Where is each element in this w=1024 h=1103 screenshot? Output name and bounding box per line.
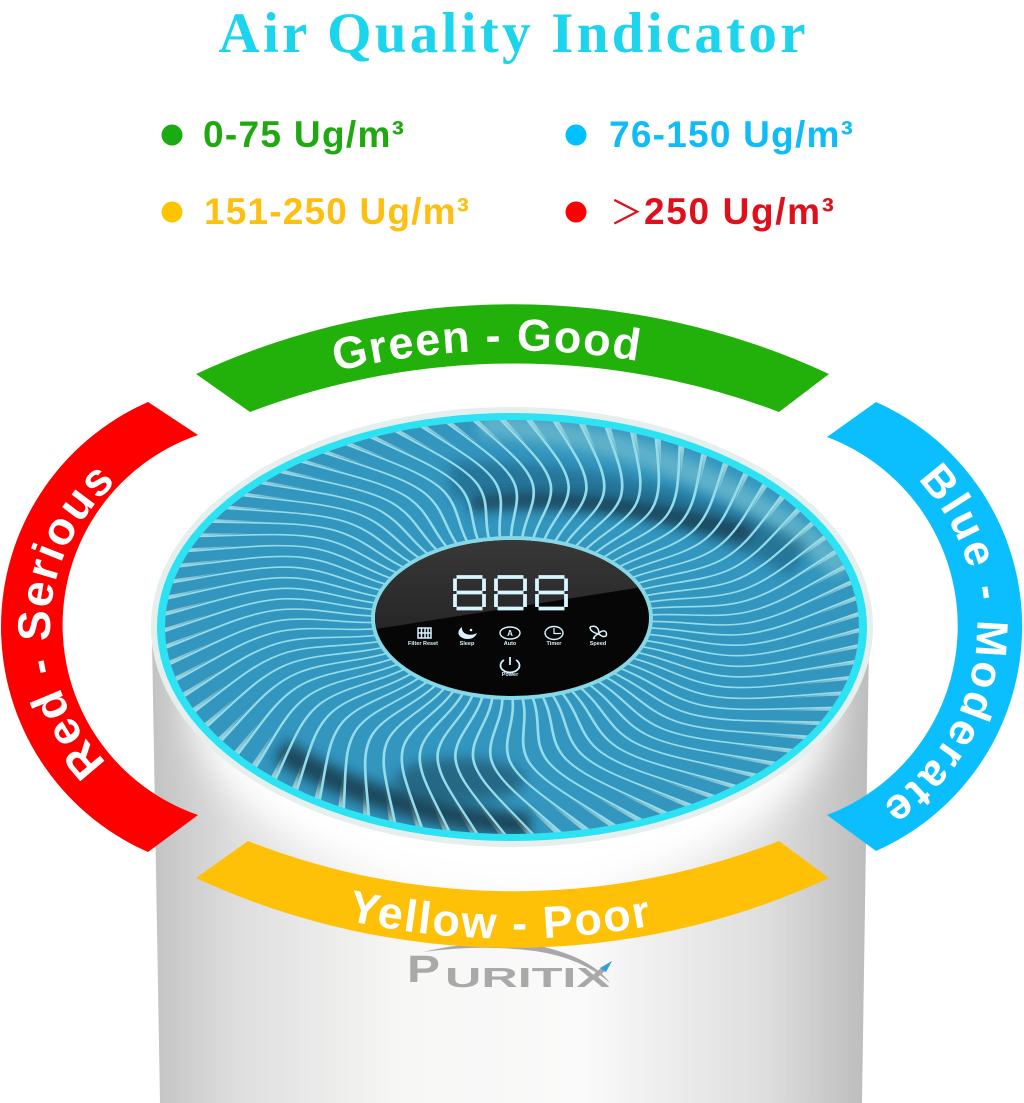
icon: sleep: Sleep xyxy=(460,641,475,647)
icon: auto: Auto xyxy=(504,641,517,647)
outer rim xyxy=(151,407,873,847)
seven segment display xyxy=(455,577,566,608)
logo: Puritix xyxy=(407,943,612,993)
legend item: green range: 0-75 Ug/m³ xyxy=(203,114,404,155)
fan grille xyxy=(165,420,859,834)
legend item: red range: ＞ xyxy=(610,194,643,231)
arc: red serious xyxy=(1,402,198,852)
arc: green good xyxy=(196,304,829,412)
icon: speed xyxy=(590,626,607,647)
icon: filter reset: Filter Reset xyxy=(408,641,438,647)
logo: Puritix: P xyxy=(407,949,440,991)
icon: sleep xyxy=(458,627,477,647)
purifier top xyxy=(151,407,873,847)
icon: timer: Timer xyxy=(547,641,562,647)
arc: red serious: Red - Serious xyxy=(18,470,112,782)
legend item: blue range: 76-150 Ug/m³ xyxy=(609,114,853,155)
icon: timer xyxy=(545,626,563,647)
legend xyxy=(162,114,853,232)
purifier body xyxy=(152,644,869,1103)
icon: power xyxy=(500,657,520,678)
legend item: yellow range: 151-250 Ug/m³ xyxy=(204,191,469,232)
icon: speed: Speed xyxy=(590,641,606,647)
icon: filter reset xyxy=(408,628,438,647)
panel ring xyxy=(371,536,653,700)
cyan indicator ring xyxy=(157,413,867,841)
logo: Puritix: URITIX xyxy=(445,962,611,993)
arc: yellow poor xyxy=(196,841,829,948)
arc: yellow poor: Yellow - Poor xyxy=(354,890,648,938)
legend item: red range: 250 Ug/m³ xyxy=(644,191,834,232)
icon: power: Power xyxy=(502,672,519,678)
arc: blue moderate xyxy=(827,402,1022,851)
icon: auto: A xyxy=(507,629,513,638)
title: Air Quality Indicator xyxy=(218,2,806,65)
arc: blue moderate: Blue - Moderate xyxy=(886,462,1008,819)
icon: auto xyxy=(500,627,520,647)
control panel xyxy=(370,530,655,696)
arc: green good: Green - Good xyxy=(334,319,640,368)
